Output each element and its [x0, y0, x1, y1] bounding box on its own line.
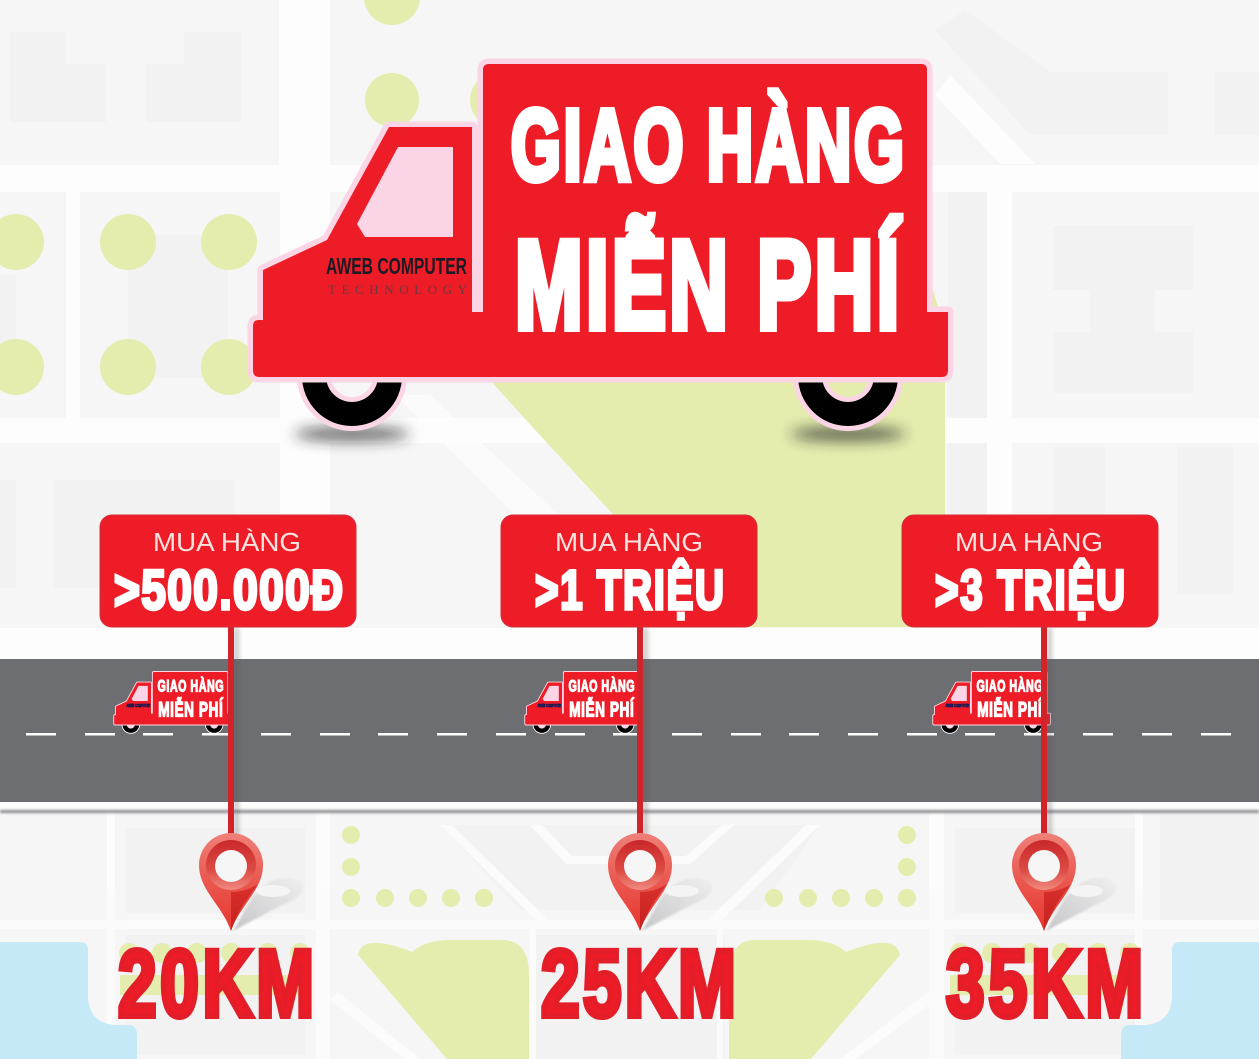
small truck 1: GIAO HÀNG [158, 676, 224, 695]
water right [1121, 942, 1259, 1059]
small truck 3 [933, 672, 1050, 734]
map pin 1 [199, 833, 303, 931]
small truck 2: AWEB COMPUTER [537, 703, 561, 708]
small truck 2: GIAO HÀNG [569, 676, 635, 695]
logo: company name: AWEB COMPUTER [326, 253, 467, 279]
small truck 3: MIỄN PHÍ [977, 696, 1043, 721]
distance 25KM: 25KM [541, 930, 736, 1037]
marker stem 3 [1041, 627, 1052, 839]
rear wheel [793, 321, 903, 431]
map pin 2 [608, 833, 712, 931]
small truck 1: MIỄN PHÍ [158, 696, 224, 721]
price card 3 [902, 515, 1158, 627]
price card 1 [100, 515, 356, 627]
small truck 1 [114, 672, 231, 734]
logo: tagline: TECHNOLOGY [328, 282, 468, 297]
road [0, 628, 1259, 813]
wheel shadows [294, 427, 906, 441]
distance 20KM: 20KM [118, 930, 314, 1037]
heading line 2: MIỄN PHÍ [515, 215, 901, 355]
distance 35KM: 35KM [946, 930, 1143, 1037]
truck body [253, 64, 948, 377]
label: MUA HÀNG [955, 527, 1103, 557]
price threshold: >3 TRIỆU [935, 559, 1125, 622]
marker stem 2 [637, 627, 648, 839]
price card 2 [501, 515, 757, 627]
green park [490, 280, 945, 627]
main delivery truck [253, 64, 948, 431]
small truck 2 [525, 672, 642, 734]
water left [0, 942, 137, 1059]
small truck 3: AWEB COMPUTER [945, 703, 969, 708]
map pin 3 [1012, 833, 1116, 931]
small truck 3: GIAO HÀNG [977, 676, 1043, 695]
price threshold: >1 TRIỆU [535, 559, 724, 622]
label: MUA HÀNG [153, 527, 301, 557]
small truck 2: MIỄN PHÍ [569, 696, 635, 721]
price threshold: >500.000Đ [114, 558, 343, 621]
marker stem 1 [228, 627, 239, 839]
small truck 1: AWEB COMPUTER [126, 703, 150, 708]
label: MUA HÀNG [555, 527, 703, 557]
front wheel [297, 321, 407, 431]
cab window [357, 147, 453, 237]
heading line 1: GIAO HÀNG [511, 89, 904, 201]
